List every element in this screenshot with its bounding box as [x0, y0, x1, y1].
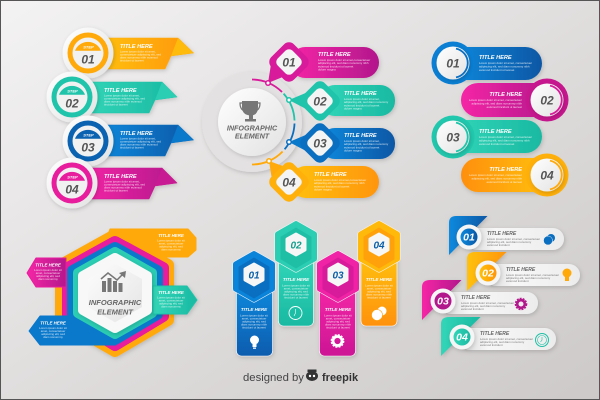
teal tag: adipiscing elit, sed	[159, 302, 183, 306]
step 03: Lorem ipsum dolor sit amet,	[120, 136, 156, 140]
panel: flag list	[422, 216, 580, 356]
blue tag: diam nonummy	[43, 335, 63, 339]
column 03: amet, consectetuer	[326, 316, 350, 320]
row 03: euismod tincidunt	[461, 307, 484, 311]
column 02: TITLE HERE	[283, 277, 310, 282]
blue tag	[29, 316, 116, 345]
column 04: diam nonummy nibh	[366, 292, 392, 296]
magenta tag: Lorem ipsum dolor sit	[34, 268, 62, 272]
column 01: diam nonummy nibh	[241, 322, 267, 326]
column 03: TITLE HERE	[325, 307, 352, 312]
column 03: diam nonummy nibh	[325, 322, 351, 326]
column 02	[278, 224, 314, 326]
white hexagon	[83, 258, 147, 328]
icon: bulb	[562, 268, 572, 281]
pill 02: 02	[540, 94, 554, 108]
row 01: 01	[463, 232, 475, 244]
pill 04: Lorem ipsum dolor sit amet, consectetuer	[469, 173, 522, 177]
item 01: dolore magna	[318, 68, 336, 72]
panel: hexagon columns	[236, 224, 398, 356]
item 03: TITLE HERE	[344, 133, 377, 139]
magenta tag: TITLE HERE	[35, 262, 62, 268]
item 04	[266, 158, 379, 205]
step 02: STEP	[67, 88, 78, 94]
orange hexagon layer	[61, 235, 168, 351]
column 02: Lorem ipsum dolor sit	[282, 284, 310, 288]
item 03: dolore magna	[344, 149, 362, 153]
panel: trophy hub	[202, 39, 395, 205]
orange tag: diam nonummy	[161, 248, 181, 252]
item 04: dolore magna	[314, 188, 332, 192]
hub title	[227, 124, 278, 140]
pill 04: 04	[540, 168, 554, 182]
orange tag	[104, 229, 196, 257]
item 03: euismod tincidunt ut laoreet	[344, 145, 380, 149]
item 02: adipiscing elit, sed diam nonummy	[344, 100, 389, 104]
magenta hexagon layer	[68, 242, 163, 345]
step 02: Lorem ipsum dolor sit amet,	[104, 94, 140, 98]
column 02: diam nonummy nibh	[283, 292, 309, 296]
column 01	[236, 254, 272, 356]
icon: bar chart with arrow	[101, 271, 126, 292]
pill 03: TITLE HERE	[479, 129, 512, 135]
column 04: amet, consectetuer	[367, 286, 391, 290]
footer credit	[243, 370, 359, 384]
magenta tag: amet, consectetuer	[36, 271, 60, 275]
blue tag: amet, consectetuer	[41, 329, 65, 333]
icon: gear	[332, 335, 344, 347]
row 04: euismod tincidunt	[480, 343, 503, 347]
item 02: dolore magna	[344, 107, 362, 111]
step 03	[62, 116, 194, 166]
row 02: adipiscing elit, sed diam nonummy	[506, 276, 551, 280]
column 01: Lorem ipsum dolor sit	[240, 314, 268, 318]
orange tag: Lorem ipsum dolor sit	[157, 238, 185, 242]
row 04: 04	[456, 332, 468, 344]
step 03: STEP	[83, 132, 94, 138]
column 04: adipiscing elit, sed	[367, 290, 391, 294]
pill 01: TITLE HERE	[479, 55, 512, 61]
item 04: 04	[282, 176, 296, 190]
item 02: TITLE HERE	[344, 91, 377, 97]
item 01: 01	[282, 56, 296, 70]
pill 01: 01	[446, 56, 460, 70]
step 03: 03	[81, 140, 95, 154]
step 04: STEP	[67, 174, 78, 180]
pill 03: Lorem ipsum dolor sit amet, consectetuer	[479, 135, 532, 139]
pill 03: euismod tincidunt ut laoreet	[479, 142, 515, 146]
step 04	[46, 158, 177, 208]
column 03: adipiscing elit, sed	[326, 320, 350, 324]
icon: trophy	[240, 101, 260, 122]
step 02: diam nonummy nibh euismod	[104, 100, 142, 104]
step 04: consectetuer adipiscing elit, sed	[104, 182, 145, 186]
panel: round pills	[432, 42, 568, 196]
panel: step banners	[46, 28, 194, 208]
hexagon title: ELEMENT	[97, 308, 134, 316]
column 04	[360, 224, 398, 326]
pill 02: euismod tincidunt ut laoreet	[487, 105, 522, 109]
column 03: Lorem ipsum dolor sit	[324, 314, 352, 318]
item 01: TITLE HERE	[318, 52, 351, 58]
row 04	[441, 317, 556, 356]
column 01: amet, consectetuer	[242, 316, 266, 320]
column 02: tincidunt ut laoreet	[284, 296, 308, 300]
column 04: 04	[373, 240, 385, 252]
blue tag: TITLE HERE	[40, 320, 67, 326]
step 03: TITLE HERE	[120, 131, 153, 137]
step 02: TITLE HERE	[104, 88, 137, 94]
step 02: tincidunt ut laoreet	[104, 102, 128, 106]
pill 02: TITLE HERE	[489, 92, 522, 98]
column 04: tincidunt ut laoreet	[367, 296, 391, 300]
blue tag: adipiscing elit, sed	[41, 332, 65, 336]
column 01: tincidunt ut laoreet	[242, 326, 266, 330]
step 02	[46, 72, 177, 122]
item 01: Lorem ipsum dolor sit amet,consectetuer	[318, 58, 370, 62]
step 01: 01	[81, 52, 95, 66]
column 04: TITLE HERE	[366, 277, 393, 282]
icon: clock	[536, 334, 548, 346]
item 03	[286, 120, 395, 166]
step 03: tincidunt ut laoreet	[120, 146, 144, 150]
step 01: tincidunt ut laoreet	[120, 58, 144, 62]
item 03: 03	[313, 136, 327, 150]
item 04: adipiscing elit, sed diam nonummy nibh	[314, 181, 365, 185]
pill 01: euismod tincidunt ut laoreet	[479, 68, 515, 72]
column 01: TITLE HERE	[241, 307, 268, 312]
column 04: Lorem ipsum dolor sit	[365, 284, 393, 288]
pill 03: adipiscing elit, sed diam nonummy nibh	[479, 138, 530, 142]
hexagon title: INFOGRAPHIC	[89, 298, 142, 307]
row 01: Lorem ipsum dolor sit amet, consectetuer	[487, 237, 540, 241]
row 02: euismod tincidunt	[506, 279, 529, 283]
blue tag: Lorem ipsum dolor sit	[39, 326, 67, 330]
pill 04: TITLE HERE	[489, 167, 522, 173]
item 03: Lorem ipsum dolor sit amet,	[344, 139, 380, 143]
pill 02: adipiscing elit, sed diam nonummy nibh	[472, 102, 522, 106]
magenta tag	[27, 258, 66, 287]
row 03: Lorem ipsum dolor sit amet, consectetuer	[461, 301, 514, 305]
column 03: 03	[332, 270, 344, 282]
hexagon title	[89, 298, 142, 316]
item 02	[286, 78, 395, 124]
step 04: tincidunt ut laoreet	[104, 188, 128, 192]
orange tag: amet, consectetuer	[159, 242, 183, 246]
pill 03	[432, 116, 542, 158]
row 03: adipiscing elit, sed diam nonummy	[461, 304, 506, 308]
row 02: 02	[482, 268, 494, 280]
row 01: euismod tincidunt	[487, 243, 510, 247]
teal tag: diam nonummy	[161, 304, 181, 308]
item 01: euismod tincidunt ut laoreet	[318, 64, 354, 68]
pill 04: adipiscing elit, sed diam nonummy nibh	[472, 176, 522, 180]
column 03: tincidunt ut laoreet	[326, 326, 350, 330]
pill 01: adipiscing elit, sed diam nonummy nibh	[479, 64, 530, 68]
step 02: 02	[65, 96, 79, 110]
magenta tag: adipiscing elit, sed	[36, 274, 60, 278]
row 01: TITLE HERE	[487, 231, 517, 237]
row 01	[449, 216, 564, 255]
pill 02: Lorem ipsum dolor sit amet, consectetuer	[469, 98, 522, 102]
teal hexagon layer	[78, 252, 152, 334]
column 02: 02	[290, 240, 302, 252]
step 04: 04	[65, 182, 79, 196]
pill 01	[432, 42, 542, 84]
step 01: Lorem ipsum dolor sit amet,	[120, 50, 156, 54]
icon: chat	[544, 234, 555, 245]
item 01	[265, 39, 379, 86]
item 02: 02	[313, 94, 327, 108]
step 01: STEP	[83, 44, 94, 50]
item 03: adipiscing elit, sed diam nonummy	[344, 142, 389, 146]
magenta tag: diam nonummy	[38, 277, 58, 281]
hub disc	[202, 72, 302, 172]
item 04: TITLE HERE	[314, 172, 347, 178]
step 01	[62, 28, 194, 78]
step 04: Lorem ipsum dolor sit amet,	[104, 180, 140, 184]
step 01: TITLE HERE	[120, 44, 153, 50]
blue hexagon layer	[73, 248, 157, 339]
pill 03: 03	[446, 130, 460, 144]
teal tag	[153, 286, 197, 314]
column 02: amet, consectetuer	[284, 286, 308, 290]
item 04: euismod tincidunt ut laoreet	[314, 184, 350, 188]
row 02: Lorem ipsum dolor sit amet, consectetuer	[506, 273, 559, 277]
step 04: TITLE HERE	[104, 174, 137, 180]
row 02	[467, 252, 580, 291]
step 04: diam nonummy nibh euismod	[104, 186, 142, 190]
step 02: consectetuer adipiscing elit, sed	[104, 96, 145, 100]
item 01: adipiscing elit, sed diam nonummy nibh	[318, 61, 369, 65]
orange tag: TITLE HERE	[158, 233, 185, 238]
pill 02	[461, 78, 568, 122]
column 01: 01	[248, 270, 260, 282]
row 03: 03	[437, 296, 449, 308]
icon: clock	[289, 306, 302, 320]
column 03	[320, 254, 356, 356]
row 01: adipiscing elit, sed diam nonummy	[487, 240, 532, 244]
orange tag: adipiscing elit, sed	[159, 244, 183, 248]
item 02: euismod tincidunt ut laoreet	[344, 103, 380, 107]
icon: light bulb	[250, 336, 259, 349]
step 01: consectetuer adipiscing elit, sed	[120, 52, 161, 56]
step 03: consectetuer adipiscing elit, sed	[120, 140, 161, 144]
pill 04	[461, 154, 568, 196]
step 03: diam nonummy nibh euismod	[120, 142, 158, 146]
icon: chat bubbles	[372, 306, 386, 320]
item 04: Lorem ipsum dolor sit amet,consectetuer	[314, 178, 366, 182]
column 01: adipiscing elit, sed	[242, 320, 266, 324]
step 01: diam nonummy nibh euismod	[120, 56, 158, 60]
pill 01: Lorem ipsum dolor sit amet, consectetuer	[479, 61, 532, 65]
row 04: adipiscing elit, sed diam nonummy	[480, 340, 525, 344]
teal tag: Lorem ipsum dolor sit	[157, 296, 185, 300]
icon: freepik mascot	[306, 370, 318, 381]
icon: gear	[516, 298, 526, 310]
row 03: TITLE HERE	[461, 295, 491, 301]
footer credit: designed by	[243, 372, 304, 384]
hub title: ELEMENT	[235, 132, 270, 140]
item 02: Lorem ipsum dolor sit amet,	[344, 97, 380, 101]
pill 04: euismod tincidunt ut laoreet	[487, 180, 522, 184]
row 04: TITLE HERE	[480, 331, 510, 337]
hub title: INFOGRAPHIC	[227, 124, 278, 132]
teal tag: TITLE HERE	[158, 290, 185, 295]
row 04: Lorem ipsum dolor sit amet, consectetuer	[480, 337, 533, 341]
panel: hexagon infographic	[27, 229, 197, 351]
footer credit: freepik	[322, 372, 359, 384]
column 02: adipiscing elit, sed	[284, 290, 308, 294]
row 03	[422, 280, 538, 320]
row 02: TITLE HERE	[506, 267, 536, 273]
teal tag: amet, consectetuer	[159, 298, 183, 302]
